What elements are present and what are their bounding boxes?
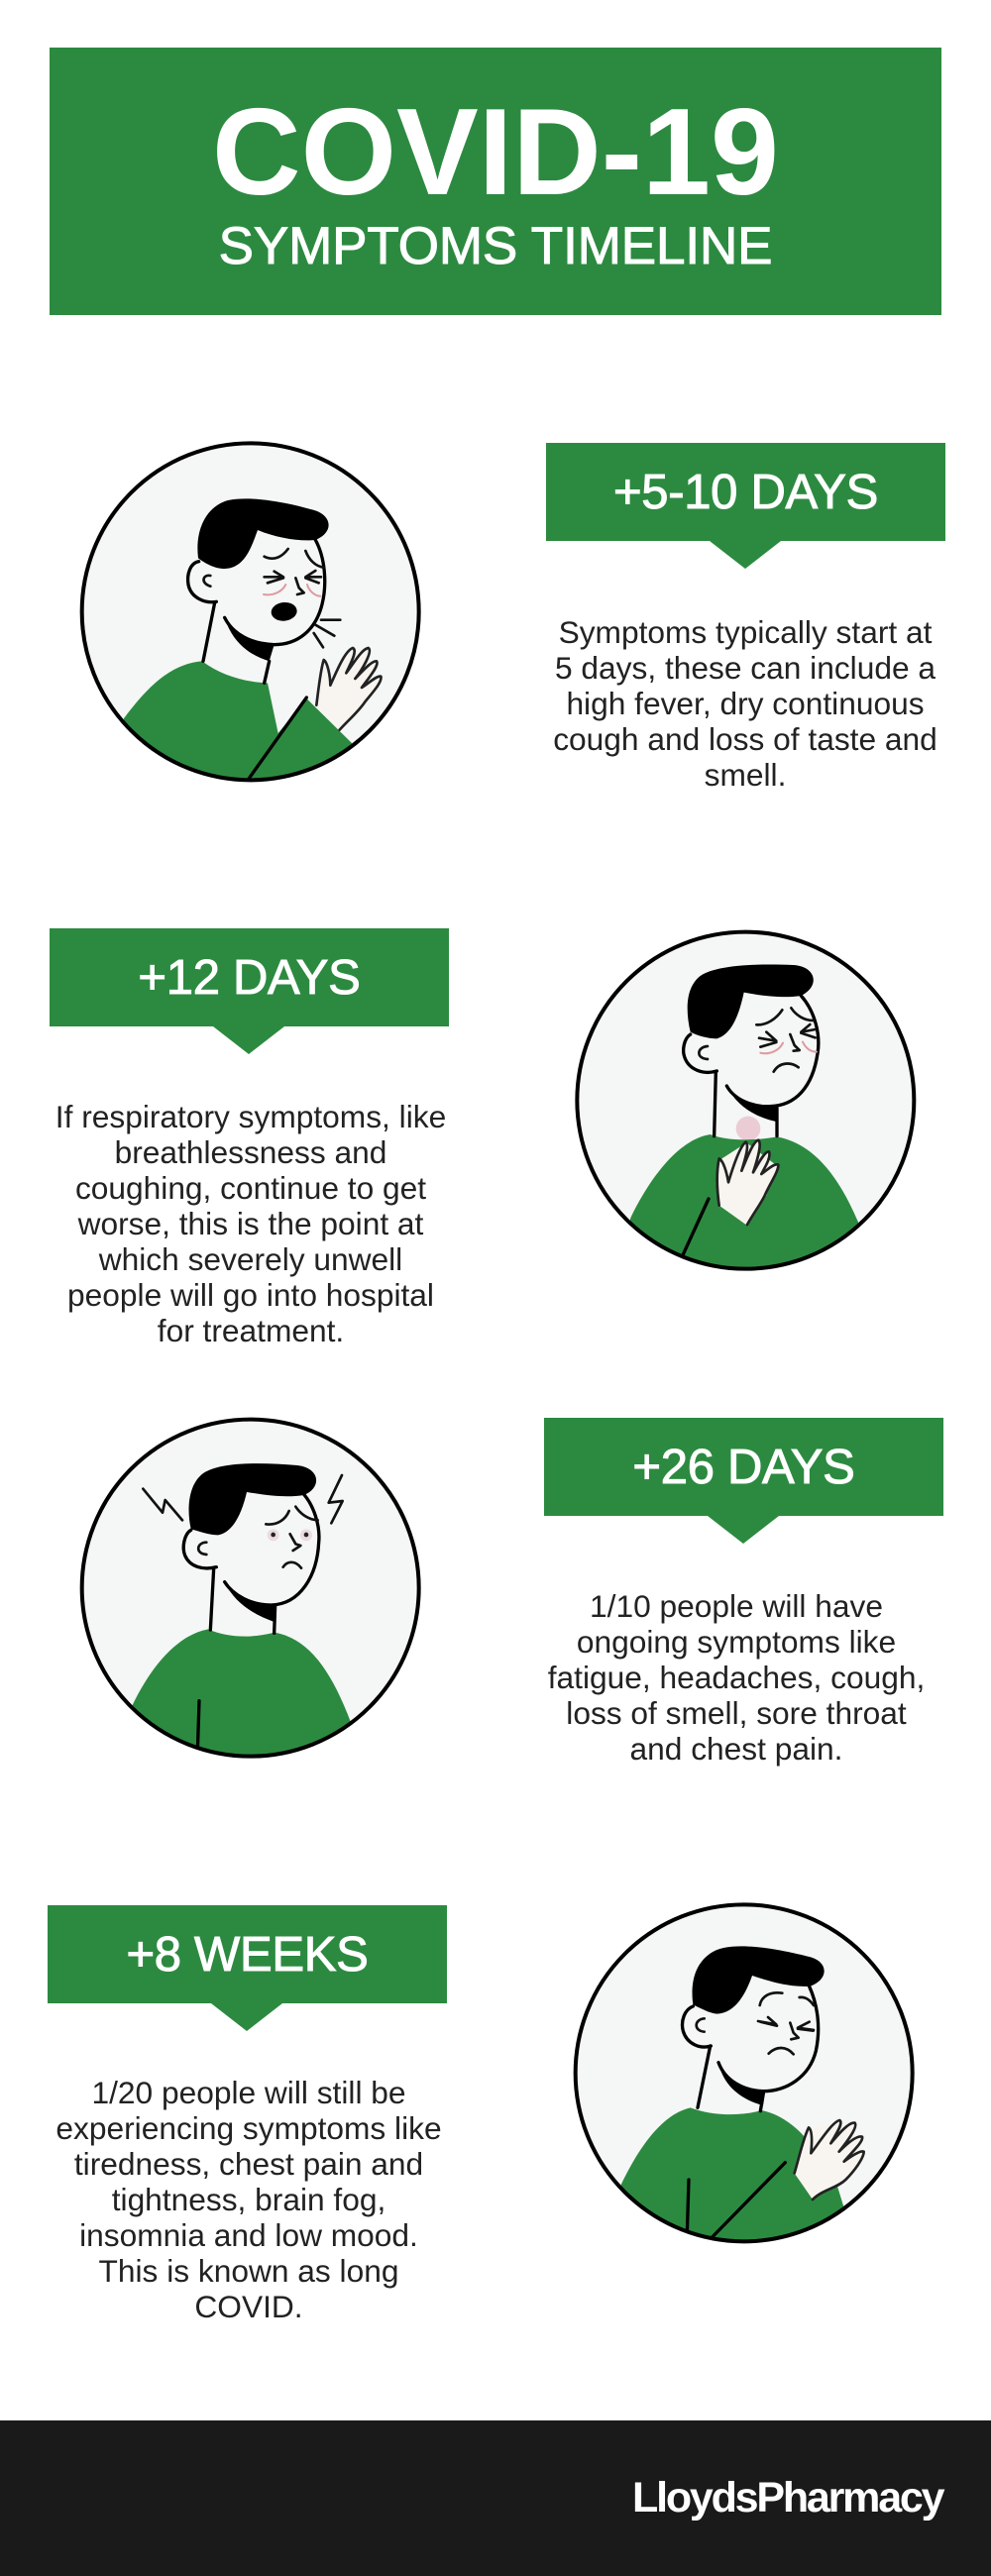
text: +8 weeks: tiredness, chest pain and [74, 2146, 423, 2182]
illustration: tired man with chest pain [573, 1902, 915, 2243]
text: +5-10 days: 5 days, these can include a [555, 650, 936, 686]
logo: LloydsPharmacy: LloydsPharmacy [632, 2474, 942, 2522]
text: +5-10 days: smell. [705, 757, 786, 793]
text: +26 days: 1/10 people will have [590, 1588, 883, 1624]
text: +5-10 days [553, 614, 937, 793]
text: +12 days: worse, this is the point at [78, 1206, 423, 1241]
text: +12 days: breathlessness and [115, 1134, 386, 1170]
badge: +26 days [544, 1418, 943, 1544]
badge: +8 weeks [48, 1905, 447, 2031]
text: +26 days: fatigue, headaches, cough, [548, 1660, 925, 1695]
text: +8 weeks: COVID. [194, 2289, 303, 2324]
title: COVID-19 [212, 84, 779, 221]
text: +12 days [55, 1099, 446, 1348]
badge: +5-10 days [546, 443, 945, 569]
footer bar [0, 2420, 991, 2576]
subtitle: SYMPTOMS TIMELINE [219, 217, 772, 275]
text: +12 days: coughing, continue to get [75, 1170, 426, 1206]
text: +26 days: loss of smell, sore throat [566, 1695, 907, 1731]
text: +8 weeks: tightness, brain fog, [112, 2182, 385, 2217]
panel: +5-10 days [79, 441, 945, 793]
text: +5-10 days: cough and loss of taste and [553, 721, 937, 757]
panel: +8 weeks [48, 1902, 915, 2324]
text: +8 weeks: This is known as long [99, 2253, 398, 2289]
badge: +8 weeks: +8 WEEKS [126, 1928, 369, 1982]
text: +5-10 days: Symptoms typically start at [559, 614, 932, 650]
illustration: man with headache [79, 1417, 421, 1759]
text: +8 weeks: experiencing symptoms like [55, 2110, 442, 2146]
badge: +26 days: +26 DAYS [632, 1441, 855, 1494]
badge: +5-10 days: +5-10 DAYS [613, 466, 878, 519]
badge: +12 days [50, 928, 449, 1054]
text: +8 weeks: 1/20 people will still be [91, 2075, 406, 2110]
text: +8 weeks [55, 2075, 442, 2324]
text: +5-10 days: high fever, dry continuous [566, 686, 925, 721]
text: +8 weeks: insomnia and low mood. [79, 2217, 418, 2253]
panel: +12 days [50, 928, 916, 1348]
text: +12 days: people will go into hospital [67, 1277, 434, 1313]
text: +26 days [548, 1588, 925, 1767]
illustration: man holding throat [575, 929, 916, 1271]
illustration: coughing man [79, 441, 421, 783]
panel: +26 days [79, 1417, 943, 1767]
text: +12 days: which severely unwell [99, 1241, 402, 1277]
header banner [50, 48, 941, 315]
badge: +12 days: +12 DAYS [138, 951, 361, 1005]
text: +12 days: If respiratory symptoms, like [55, 1099, 446, 1134]
text: +12 days: for treatment. [158, 1313, 344, 1348]
text: +26 days: and chest pain. [630, 1731, 842, 1767]
text: +26 days: ongoing symptoms like [577, 1624, 896, 1660]
